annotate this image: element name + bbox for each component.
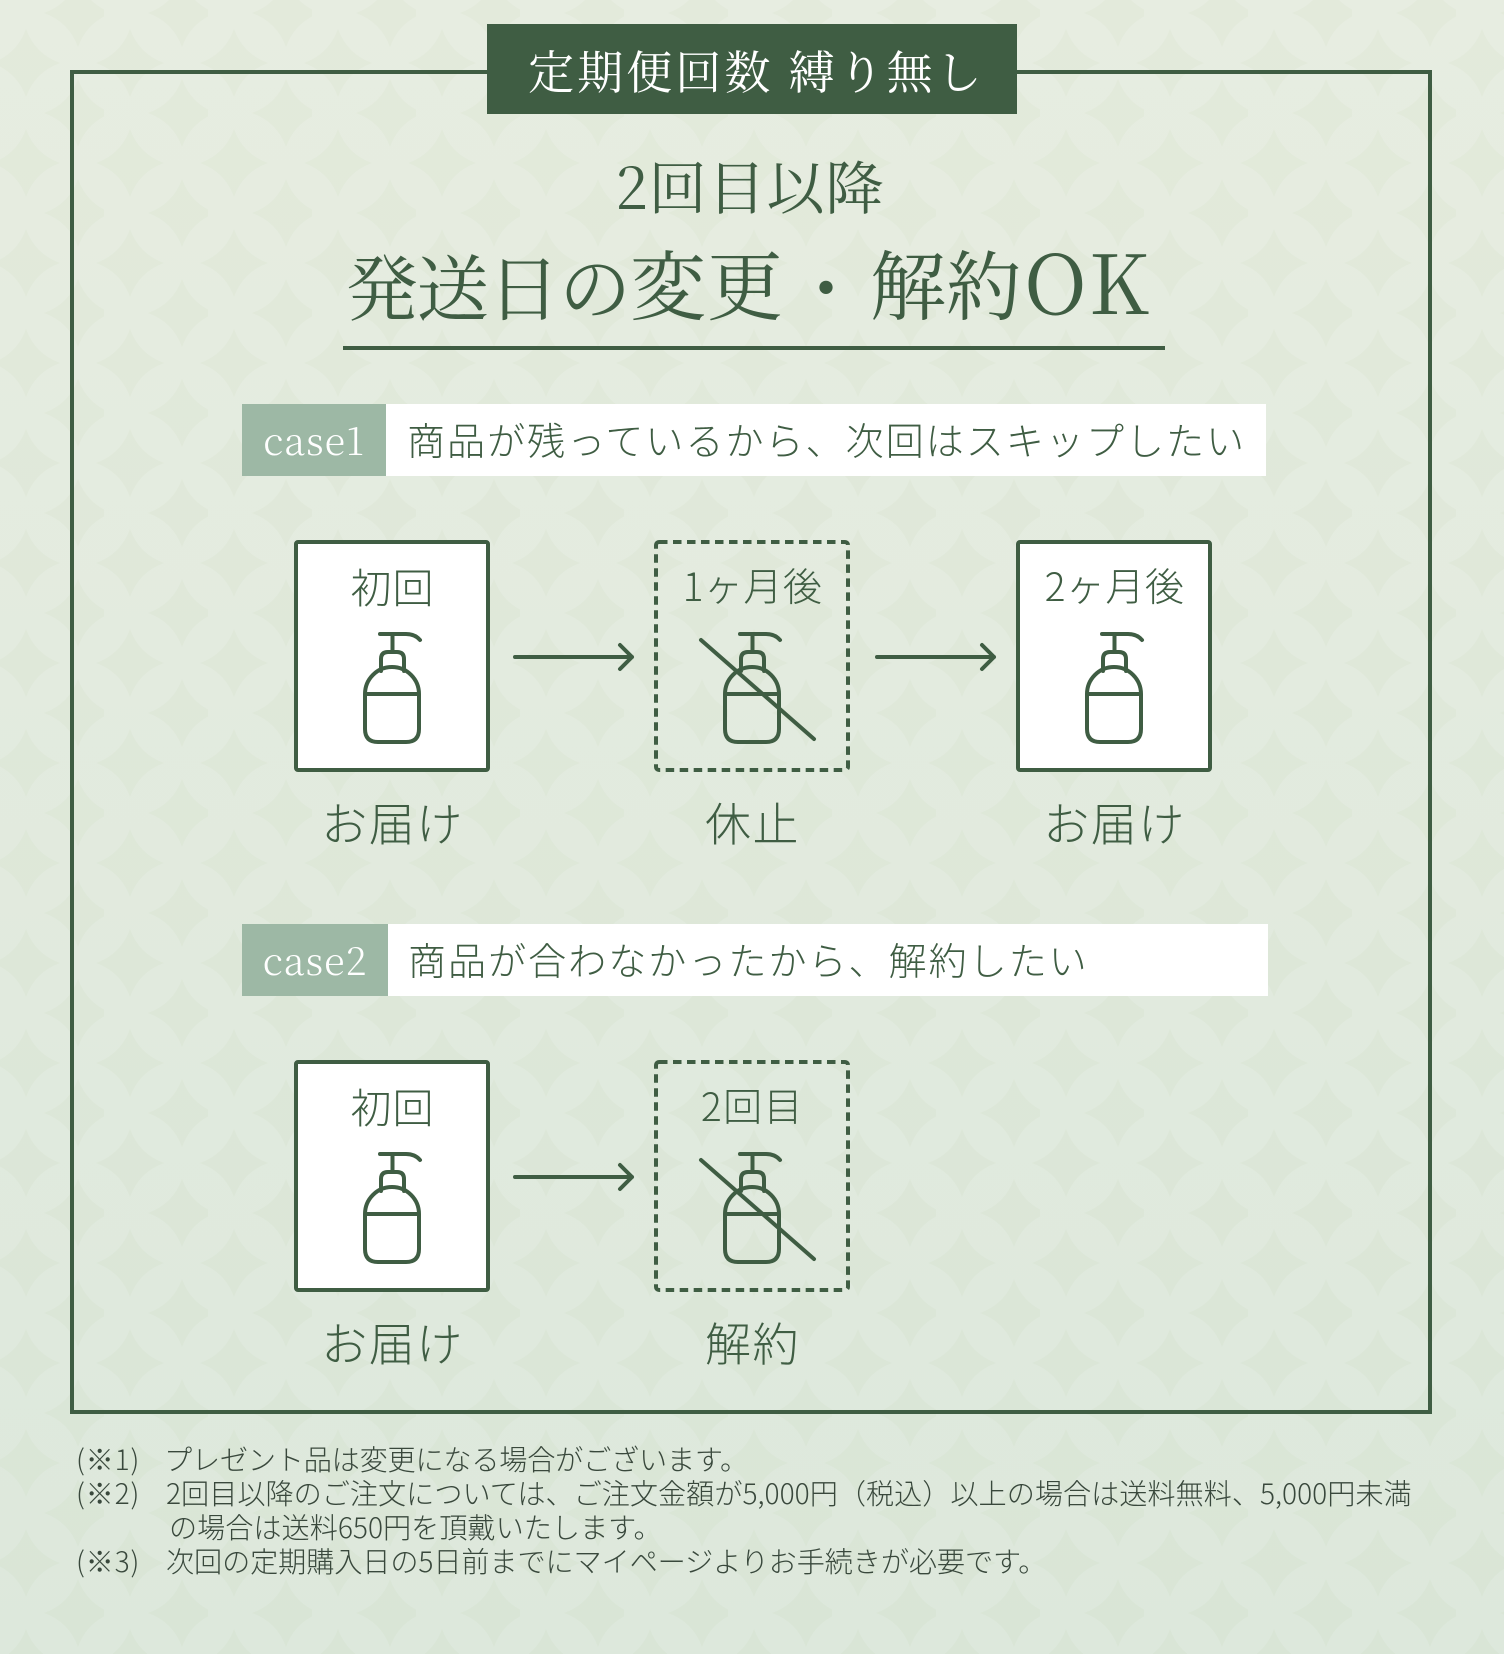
- step caption: 解約: [705, 1309, 800, 1375]
- box with bottle icon: [1016, 540, 1212, 772]
- case2 text: 商品が合わなかったから、解約したい: [408, 931, 1089, 986]
- arrow: [513, 1162, 634, 1192]
- case1 label: case1: [263, 411, 365, 466]
- case2 header: [242, 924, 1268, 996]
- heading underline: [343, 346, 1165, 350]
- outer frame: [70, 70, 1432, 1414]
- case2 step 1 card: [294, 1060, 490, 1375]
- case1 step 2 card: [654, 540, 850, 855]
- dashed box with crossed bottle icon: [654, 1060, 850, 1292]
- footnote 2 mark: (※2): [76, 1472, 140, 1513]
- footnote 2 text: 2回目以降のご注文については、ご注文金額が5,000円（税込）以上の場合は送料無料、5,000円未満: [166, 1472, 1412, 1513]
- step label: 初回: [350, 1075, 434, 1135]
- heading line 1: 2回目以降: [615, 142, 885, 226]
- heading line 2: OK: [1024, 221, 1152, 338]
- footnote 1 text: プレゼント品は変更になる場合がございます。: [164, 1438, 748, 1479]
- case1 text: 商品が残っているから、次回はスキップしたい: [407, 411, 1246, 466]
- case1 label: [242, 404, 386, 476]
- case2 step 2 card: [654, 1060, 850, 1375]
- step caption: お届け: [321, 1309, 464, 1375]
- step caption: 休止: [705, 789, 800, 855]
- footnote 2 continuation: の場合は送料650円を頂戴いたします。: [169, 1506, 662, 1547]
- footnotes: [76, 1438, 1412, 1581]
- arrow: [513, 642, 634, 672]
- heading line 2: 変更: [630, 227, 784, 336]
- step label: 1ヶ月後: [683, 557, 822, 613]
- footnote 3 text: 次回の定期購入日の5日前までにマイページよりお手続きが必要です。: [166, 1540, 1046, 1581]
- footnote 3 mark: (※3): [76, 1540, 140, 1581]
- dashed box with crossed bottle icon: [654, 540, 850, 772]
- box with bottle icon: [294, 540, 490, 772]
- step caption: お届け: [1043, 789, 1186, 855]
- heading line 2: ・: [790, 232, 861, 336]
- footnote 1 mark: (※1): [76, 1438, 140, 1479]
- arrow: [875, 642, 996, 672]
- step label: 2ヶ月後: [1045, 557, 1184, 613]
- top banner: [487, 24, 1017, 114]
- case1 step 3 card: [1016, 540, 1212, 855]
- step label: 2回目: [701, 1077, 804, 1133]
- case1 header: [242, 404, 1266, 476]
- heading line 2: 発送日の: [346, 232, 630, 336]
- case1 step 1 card: [294, 540, 490, 855]
- top banner: 定期便回数 縛り無し: [528, 37, 985, 103]
- case2 label: case2: [263, 931, 367, 986]
- step label: 初回: [350, 555, 434, 615]
- heading line 2: [346, 221, 1152, 338]
- case2 label: [242, 924, 388, 996]
- box with bottle icon: [294, 1060, 490, 1292]
- step caption: お届け: [321, 789, 464, 855]
- heading line 2: 解約: [870, 227, 1022, 336]
